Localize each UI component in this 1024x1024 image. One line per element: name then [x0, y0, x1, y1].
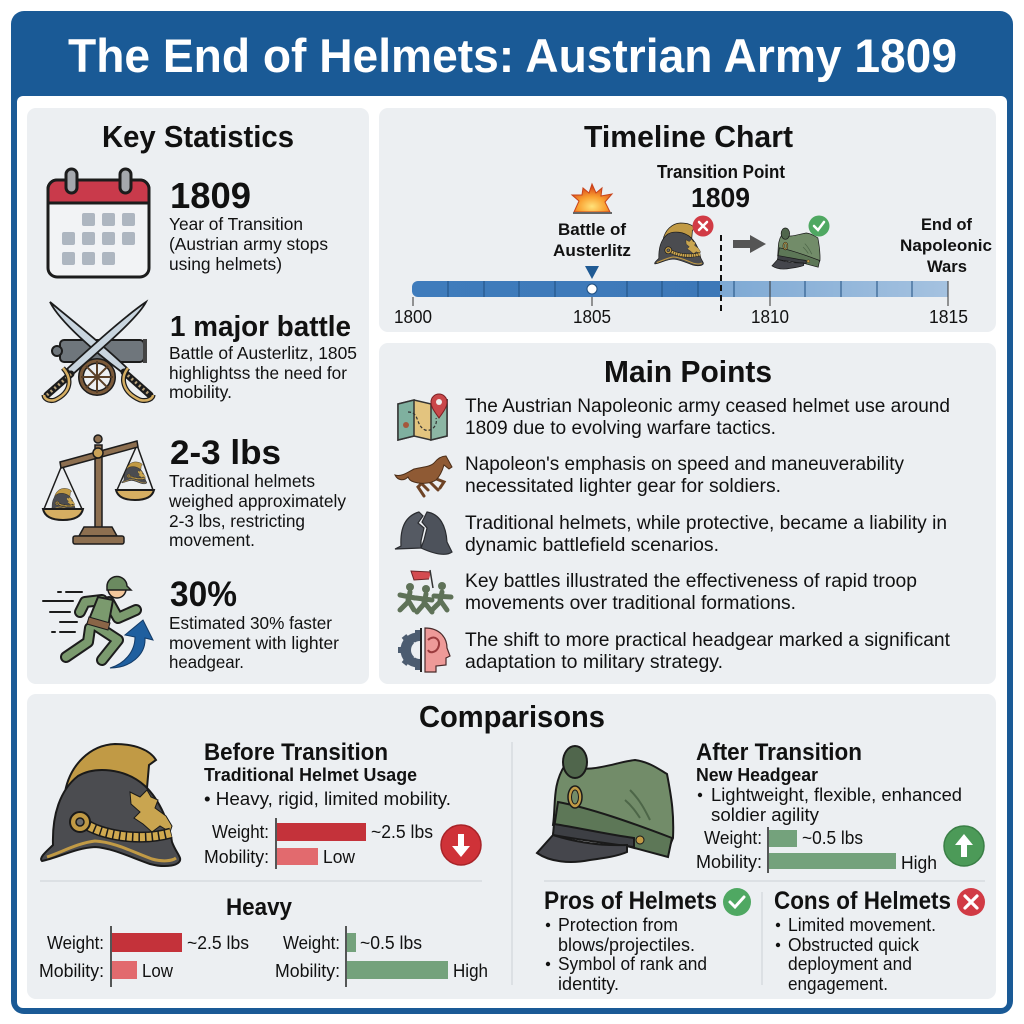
text: point 1: The Austrian Napoleonic army ceased helmet use around [465, 395, 950, 417]
icon: new headgear [537, 746, 673, 862]
text: after transition: After Transition [696, 739, 862, 766]
icon: cracked helmet [395, 512, 452, 554]
bar chart: heavy comparison left: Mobility: [39, 960, 104, 981]
stat: 30%: movement with lighter [169, 633, 339, 653]
stat: 1809 [169, 175, 328, 274]
text: point 3 [465, 512, 947, 556]
label: transition point [657, 162, 785, 213]
timeline bar [412, 281, 948, 306]
panel: key statistics [27, 108, 369, 684]
heading: timeline chart: Timeline Chart [584, 119, 793, 154]
arrow [733, 235, 766, 253]
text: point 3: Traditional helmets, while protective, became a liability in [465, 512, 947, 534]
stat: 2-3 lbs: movement. [169, 530, 255, 550]
axis labels [394, 307, 968, 327]
stat: 1 major battle [169, 311, 357, 402]
panel: comparisons [27, 694, 996, 999]
bar chart: before transition: Low [323, 846, 356, 867]
bar chart: before transition: Mobility: [204, 846, 269, 867]
icon: traditional helmet [41, 744, 180, 866]
bar chart: heavy comparison left: Weight: [47, 932, 104, 953]
panel: timeline chart [379, 108, 996, 332]
bar chart: heavy comparison right: ~0.5 lbs [360, 932, 422, 953]
label: end of napoleonic wars: Wars [927, 257, 967, 276]
text: after transition: New Headgear [696, 765, 818, 785]
label: end of napoleonic wars [900, 215, 992, 276]
icon: old helmet with cross [655, 216, 714, 266]
icon: calendar [48, 169, 149, 277]
text: point 4 [465, 570, 917, 614]
pros of helmets: Protection from [558, 914, 678, 935]
text: point 2: necessitated lighter gear for soldiers. [465, 475, 781, 497]
label: transition point: Transition Point [657, 162, 785, 182]
stat: 30%: Estimated 30% faster [169, 613, 332, 633]
heading: comparisons: Comparisons [419, 699, 605, 734]
text: point 2: Napoleon's emphasis on speed and maneuverability [465, 453, 904, 475]
cons of helmets: Cons of Helmets [774, 887, 951, 915]
stat: 1809: 1809 [170, 175, 251, 216]
cons of helmets: engagement. [788, 973, 888, 994]
text: point 1 [465, 395, 950, 439]
stat: 2-3 lbs: Traditional helmets [169, 471, 315, 491]
pros of helmets: Pros of Helmets [544, 887, 717, 915]
text: point 5: The shift to more practical headgear marked a significant [465, 629, 951, 651]
bar chart: heavy comparison right: Mobility: [275, 960, 340, 981]
transition line [720, 235, 722, 312]
heading: heavy: Heavy [226, 894, 293, 921]
bar chart: heavy comparison right: High [453, 960, 488, 981]
stat: 1 major battle: mobility. [169, 382, 232, 402]
text: before transition: Traditional Helmet Usage [204, 765, 417, 785]
stat: 1809: Year of Transition [169, 214, 303, 234]
stat: 2-3 lbs: 2-3 lbs, restricting [169, 511, 305, 531]
heading: key statistics: Key Statistics [102, 119, 294, 154]
bar chart: before transition: ~2.5 lbs [371, 821, 433, 842]
stat: 2-3 lbs: weighed approximately [168, 491, 346, 511]
stat: 1 major battle: 1 major battle [170, 311, 351, 343]
label: end of napoleonic wars: Napoleonic [900, 236, 992, 255]
text: after transition [696, 739, 962, 825]
icon: galloping horse [395, 456, 452, 496]
heading: main points: Main Points [604, 354, 772, 389]
icon: troops with flag [400, 570, 451, 612]
icon: map with pin [398, 394, 447, 440]
icon: new cap with check [772, 216, 830, 269]
stat: 30%: headgear. [169, 652, 244, 672]
cons of helmets: Obstructed quick [788, 934, 920, 955]
bar chart: before transition: Weight: [212, 821, 269, 842]
text: before transition [204, 739, 451, 809]
cons of helmets: deployment and [788, 953, 912, 974]
bar chart: heavy comparison right: Weight: [283, 932, 340, 953]
pros of helmets [544, 887, 751, 994]
bar chart: heavy comparison left [39, 926, 249, 987]
bar chart: after transition: ~0.5 lbs [802, 827, 863, 848]
bar chart: heavy comparison right [275, 926, 488, 987]
text: point 4: movements over traditional formations. [465, 592, 796, 614]
stat: 2-3 lbs: 2-3 lbs [170, 434, 281, 472]
label: battle of austerlitz: Austerlitz [553, 241, 631, 260]
stat: 1 major battle: Battle of Austerlitz, 1805 [169, 343, 357, 363]
icon: up arrow [944, 826, 984, 866]
axis labels: 1815 [929, 307, 968, 327]
text: point 1: 1809 due to evolving warfare tactics. [465, 417, 776, 439]
marker: 1805 [585, 266, 599, 279]
axis labels: 1800 [394, 307, 432, 327]
cons of helmets: Limited movement. [788, 914, 936, 935]
bar chart: after transition [696, 827, 937, 873]
icon: gear and brain head [398, 628, 450, 672]
text: before transition: Before Transition [204, 739, 388, 766]
bar chart: after transition: Mobility: [696, 851, 762, 872]
text: point 5 [465, 629, 951, 673]
text: point 4: Key battles illustrated the effectiveness of rapid troop [465, 570, 917, 592]
stat: 30%: 30% [170, 575, 237, 614]
label: transition point: 1809 [691, 182, 750, 213]
pros of helmets: blows/projectiles. [558, 934, 695, 955]
text: after transition: Lightweight, flexible, enhanced [711, 784, 962, 805]
pros of helmets: Symbol of rank and [558, 953, 707, 974]
title: The End of Helmets: Austrian Army 1809 [68, 29, 957, 82]
stat: 1 major battle: highlightss the need for [169, 363, 347, 383]
icon: down arrow [441, 825, 481, 865]
text: before transition: • Heavy, rigid, limited mobility. [204, 788, 451, 809]
pros of helmets: identity. [558, 973, 619, 994]
bar chart: after transition: High [901, 852, 937, 873]
stat: 1809: (Austrian army stops [169, 234, 328, 254]
stat: 1809: using helmets) [169, 254, 282, 274]
cons of helmets [774, 887, 985, 994]
label: end of napoleonic wars: End of [921, 215, 972, 234]
text: after transition: soldier agility [711, 804, 820, 825]
bar chart: before transition [204, 818, 433, 869]
text: point 3: dynamic battlefield scenarios. [465, 534, 719, 556]
text: point 5: adaptation to military strategy. [465, 651, 723, 673]
stat: 2-3 lbs [168, 434, 346, 550]
stat: 30% [169, 575, 339, 672]
label: battle of austerlitz: Battle of [558, 220, 626, 239]
label: battle of austerlitz [553, 220, 631, 260]
icon: crossed swords and cannon [44, 302, 153, 401]
icon: explosion [572, 184, 612, 214]
axis labels: 1810 [751, 307, 789, 327]
bar chart: heavy comparison left: Low [142, 960, 174, 981]
icon: running soldier [43, 576, 153, 668]
bar chart: after transition: Weight: [704, 827, 762, 848]
bar chart: heavy comparison left: ~2.5 lbs [187, 932, 249, 953]
axis labels: 1805 [573, 307, 611, 327]
icon: balance scale with helmets [43, 435, 154, 544]
text: point 2 [465, 453, 904, 497]
panel: main points [379, 343, 996, 684]
